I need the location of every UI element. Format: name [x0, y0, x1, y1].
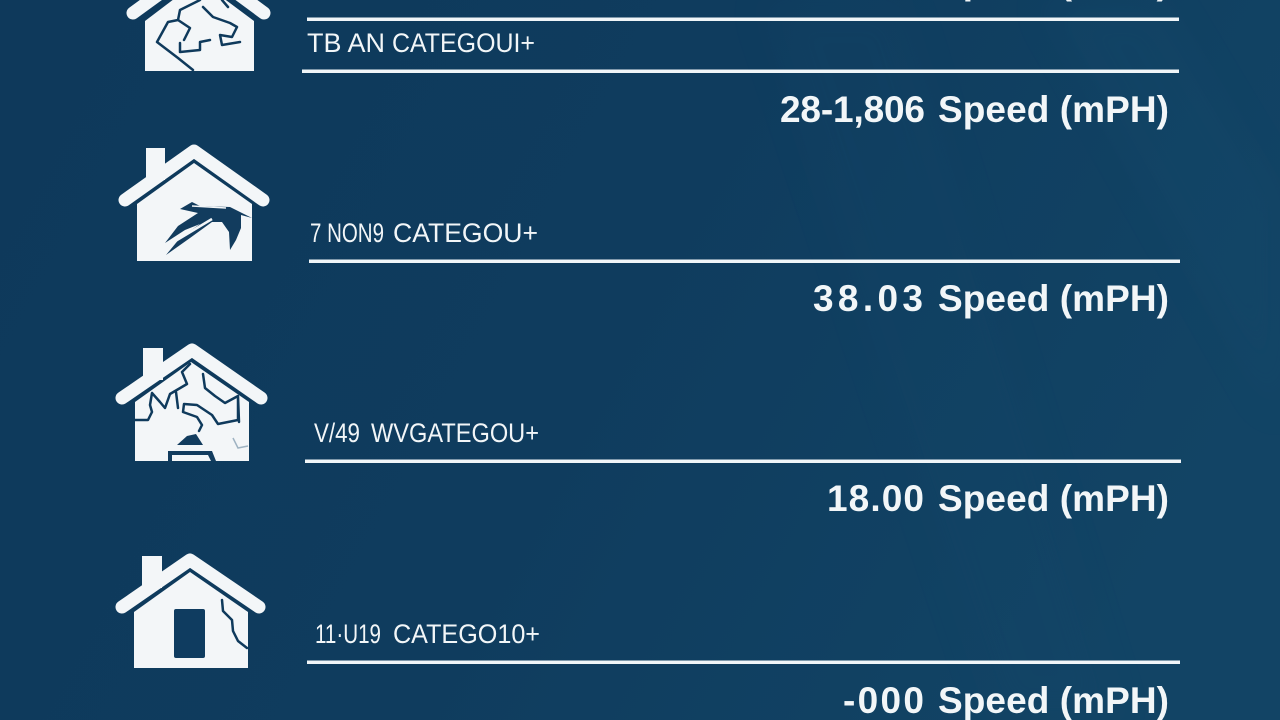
category label 2: 7 NON9 — [310, 218, 384, 248]
category label 3 — [314, 418, 539, 448]
speed value 2 — [813, 278, 1169, 319]
icon: house with severe cracks, cut off at top — [133, 0, 264, 71]
speed value 1 — [780, 89, 1169, 130]
speed value 1: Speed (mPH) — [938, 89, 1169, 130]
category label 2 — [310, 218, 538, 248]
speed value 4: -000 — [843, 680, 924, 720]
category label 4: 11·U19 — [315, 619, 381, 649]
category label 1: CATEGOUI+ — [392, 28, 535, 58]
rule below category 4 — [307, 660, 1180, 664]
category label 2: CATEGOU+ — [393, 218, 538, 248]
category label 4 — [315, 619, 540, 649]
category label 1: TB AN — [307, 28, 385, 58]
speed value 3 — [827, 478, 1169, 519]
category label 4: CATEGO10+ — [393, 619, 540, 649]
row 4: category — [122, 556, 1180, 720]
rule below category 2 — [309, 260, 1180, 263]
speed value 2: Speed (mPH) — [938, 278, 1169, 319]
speed value 3: Speed (mPH) — [938, 478, 1169, 519]
category label 1 — [307, 28, 535, 58]
row 1: category — [133, 0, 1179, 130]
rule below category 1 — [302, 70, 1179, 73]
category label 3: V/49 — [314, 418, 360, 448]
speed value 1: 28-1,806 — [780, 89, 925, 130]
icon: house with roof damage — [125, 148, 263, 261]
speed value 2: 38.03 — [813, 278, 923, 319]
speed value 4: Speed (mPH) — [938, 680, 1169, 720]
row 3: category — [122, 348, 1181, 519]
rule below category 3 — [305, 460, 1181, 463]
row 2: category — [125, 148, 1180, 319]
category label 3: WVGATEGOU+ — [371, 418, 539, 448]
rule above category 1 — [307, 18, 1179, 21]
row 1 speed label — [780, 0, 1169, 2]
icon: house with minor crack — [122, 556, 259, 668]
speed value 3: 18.00 — [827, 478, 924, 519]
icon: house with structural cracks — [122, 348, 261, 461]
